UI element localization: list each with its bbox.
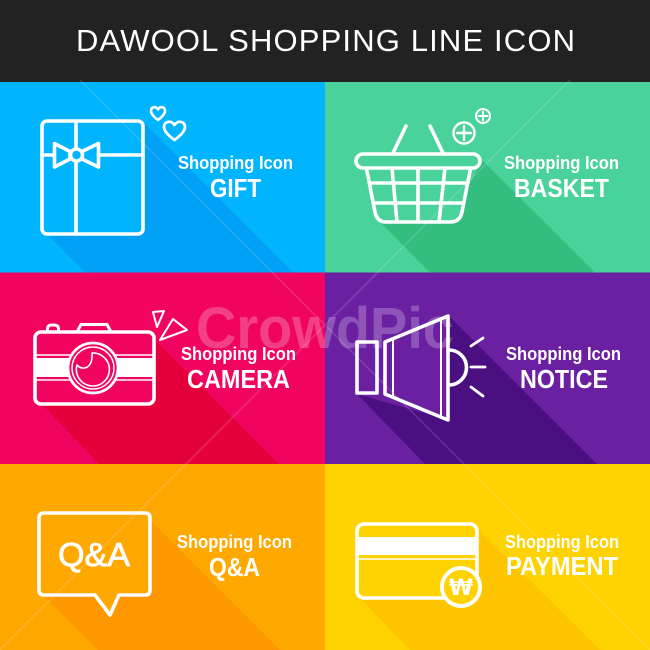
panel: basket	[325, 82, 650, 272]
label: basket: Shopping Icon	[504, 152, 619, 173]
label: payment	[505, 531, 619, 581]
icon: speech bubble	[39, 513, 150, 615]
label: notice: NOTICE	[520, 364, 608, 394]
label: payment: PAYMENT	[506, 551, 618, 581]
label: camera	[181, 343, 296, 394]
watermark: CrowdPic	[196, 296, 454, 361]
panel: notice	[325, 272, 650, 464]
icon: camera	[35, 311, 187, 404]
label: camera: CAMERA	[187, 364, 290, 394]
icon: sound rays	[471, 338, 485, 396]
panel: gift	[0, 82, 325, 272]
icon: plus badges	[454, 109, 490, 144]
panel: camera	[0, 272, 325, 464]
icon: basket	[356, 109, 490, 222]
title bar	[0, 0, 650, 82]
icon: hearts	[151, 107, 185, 140]
icon: won coin: ₩	[449, 576, 473, 601]
panel: payment	[325, 464, 650, 650]
label: basket	[504, 152, 619, 203]
icon: speech bubble: Q&A	[58, 536, 130, 573]
icon: gift box	[42, 107, 185, 234]
label: camera: Shopping Icon	[181, 343, 296, 364]
label: q&a: Q&A	[209, 552, 260, 582]
icon: flash triangles	[153, 311, 187, 340]
icon: credit card	[357, 524, 480, 606]
panel: q&a	[0, 464, 325, 650]
label: basket: BASKET	[514, 173, 609, 203]
label: notice: Shopping Icon	[506, 343, 621, 364]
label: gift: GIFT	[210, 173, 261, 203]
label: payment: Shopping Icon	[505, 531, 619, 552]
label: q&a	[177, 531, 292, 582]
label: gift	[178, 152, 293, 203]
icon: megaphone	[357, 316, 485, 420]
label: gift: Shopping Icon	[178, 152, 293, 173]
label: notice	[506, 343, 621, 394]
title: DAWOOL SHOPPING LINE ICON	[76, 23, 575, 58]
label: q&a: Shopping Icon	[177, 531, 292, 552]
